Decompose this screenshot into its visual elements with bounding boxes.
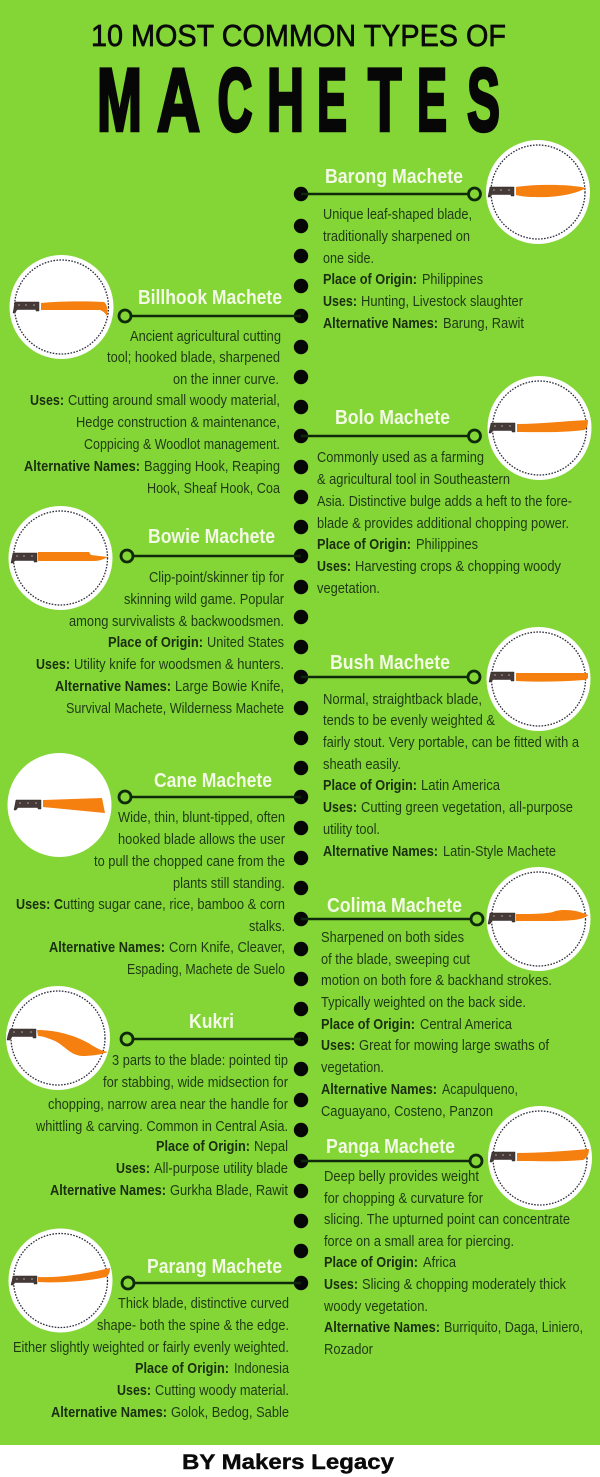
text: billhook description: Hook, Sheaf Hook, Coa: [147, 480, 281, 497]
text: barong description: Alternative Names:: [323, 315, 438, 332]
text: cane description: hooked blade allows the user: [118, 831, 285, 848]
text: kukri description: for stabbing, wide midsection for: [103, 1074, 288, 1091]
text: kukri description: 3 parts to the blade: pointed tip: [112, 1052, 288, 1069]
connector: bolo: [301, 430, 480, 442]
heading: parang machete: Parang Machete: [147, 1256, 282, 1278]
text: panga description: woody vegetation.: [323, 1298, 428, 1315]
text: bowie description: Large Bowie Knife,: [175, 678, 284, 695]
text: colima description: Alternative Names:: [321, 1081, 437, 1098]
text: panga description: force on a small area for piercing.: [324, 1233, 514, 1250]
text: cane description: Espading, Machete de Suelo: [127, 961, 285, 978]
title word: machetes: M: [97, 49, 142, 149]
text: kukri description: Alternative Names:: [50, 1182, 166, 1199]
text: colima description: motion on both fore & backhand strokes.: [321, 972, 552, 989]
text: billhook description: Cutting around small woody material,: [68, 392, 280, 409]
text: colima description: Uses:: [321, 1037, 355, 1054]
text: kukri description: Gurkha Blade, Rawit: [170, 1182, 289, 1199]
text: cane description: to pull the chopped cane from the: [94, 853, 285, 870]
text: cane description: Corn Knife, Cleaver,: [169, 939, 285, 956]
text: cane description: Wide, thin, blunt-tipped, often: [118, 809, 285, 826]
text: panga description: Rozador: [324, 1341, 373, 1358]
text: bolo description: Place of Origin:: [317, 536, 411, 553]
text: parang description: Thick blade, distinctive curved: [118, 1295, 289, 1312]
text: billhook description: Hedge construction & maintenance,: [76, 414, 280, 431]
text: bush description: utility tool.: [323, 821, 380, 838]
text: panga description: Place of Origin:: [324, 1254, 418, 1271]
text: bush description: [323, 691, 580, 860]
text: parang description: Place of Origin:: [135, 1360, 229, 1377]
text: cane description: [16, 809, 285, 978]
connector: cane: [119, 791, 301, 803]
text: panga description: Slicing & chopping moderately thick: [362, 1276, 566, 1293]
text: billhook description: Ancient agricultural cutting: [130, 328, 281, 345]
text: colima description: Typically weighted on the back side.: [321, 994, 526, 1011]
text: bowie description: United States: [207, 634, 284, 651]
connector: billhook: [119, 310, 301, 322]
text: bush description: Cutting green vegetation, all-purpose: [361, 799, 573, 816]
text: colima description: Place of Origin:: [321, 1016, 415, 1033]
text: bush description: sheath easily.: [323, 756, 401, 773]
icon: colima machete: [486, 867, 590, 971]
panel: panga machete: [301, 1106, 592, 1358]
timeline spine dots: [294, 187, 308, 1290]
panel: colima machete: [301, 867, 590, 1120]
title word: machetes: C: [218, 49, 252, 149]
text: cane description: plants still standing.: [173, 875, 285, 892]
text: colima description: [321, 929, 552, 1120]
text: colima description: Great for mowing large swaths of: [359, 1037, 550, 1054]
text: cane description: Uses: C: [16, 896, 63, 913]
text: bolo description: & agricultural tool in Southeastern: [317, 471, 510, 488]
text: bush description: tends to be evenly weighted &: [323, 712, 495, 729]
icon: bowie machete: [8, 506, 112, 610]
connector: parang: [122, 1277, 301, 1289]
text: billhook description: Bagging Hook, Reaping: [144, 458, 280, 475]
text: parang description: shape- both the spine & the edge.: [97, 1317, 289, 1334]
text: barong description: Philippines: [422, 271, 483, 288]
title word: machetes: T: [368, 49, 402, 149]
heading: billhook machete: Billhook Machete: [138, 287, 282, 309]
text: bush description: Latin America: [421, 777, 501, 794]
title line: 10 most common types of: 10 MOST COMMON TYPES OF: [91, 19, 506, 53]
text: colima description: vegetation.: [321, 1059, 384, 1076]
text: kukri description: whittling & carving. Common in Central Asia.: [35, 1118, 288, 1135]
text: bush description: Place of Origin:: [323, 777, 417, 794]
icon: kukri: [6, 986, 110, 1090]
text: panga description: [323, 1168, 583, 1358]
text: colima description: Central America: [420, 1016, 513, 1033]
text: barong description: one side.: [323, 250, 374, 267]
text: barong description: Place of Origin:: [323, 271, 417, 288]
text: kukri description: chopping, narrow area near the handle for: [48, 1096, 288, 1113]
connector: barong: [301, 188, 480, 200]
text: parang description: [13, 1295, 290, 1421]
panel: billhook machete: [10, 255, 301, 497]
panel: barong machete: [301, 140, 590, 332]
heading: bush machete: Bush Machete: [330, 652, 450, 674]
title word: machetes: [97, 49, 500, 149]
text: kukri description: [35, 1052, 289, 1199]
title: [91, 19, 506, 149]
text: bush description: Latin-Style Machete: [443, 843, 556, 860]
text: colima description: Caguayano, Costeno, Panzon: [321, 1103, 493, 1120]
text: bowie description: Uses:: [36, 656, 70, 673]
text: panga description: Alternative Names:: [324, 1319, 440, 1336]
heading: bolo machete: Bolo Machete: [335, 407, 450, 429]
icon: cane machete: [8, 753, 112, 857]
text: bush description: Alternative Names:: [323, 843, 438, 860]
text: barong description: Barung, Rawit: [443, 315, 525, 332]
text: parang description: Either slightly weighted or fairly evenly weighted.: [13, 1339, 289, 1356]
text: bowie description: [36, 569, 284, 717]
text: bolo description: [317, 449, 572, 597]
text: bowie description: Survival Machete, Wilderness Machete: [66, 700, 284, 717]
panel: cane machete: [8, 753, 301, 978]
text: parang description: Uses:: [117, 1382, 151, 1399]
text: bowie description: Clip-point/skinner tip for: [149, 569, 284, 586]
heading: kukri: Kukri: [189, 1011, 234, 1033]
text: bowie description: skinning wild game. Popular: [124, 591, 284, 608]
text: barong description: Uses:: [323, 293, 357, 310]
text: bolo description: Philippines: [416, 536, 478, 553]
heading: barong machete: Barong Machete: [325, 166, 463, 188]
text: panga description: for chopping & curvature for: [324, 1190, 483, 1207]
heading: colima machete: Colima Machete: [327, 895, 462, 917]
text: bowie description: among survivalists & backwoodsmen.: [69, 613, 284, 630]
text: bolo description: vegetation.: [317, 580, 380, 597]
connector: panga: [301, 1155, 482, 1167]
panel: bush machete: [301, 627, 590, 860]
text: cane description: utting sugar cane, rice, bamboo & corn: [63, 896, 285, 913]
text: billhook description: [24, 328, 281, 497]
text: bush description: Uses:: [323, 799, 357, 816]
text: billhook description: on the inner curve.: [173, 371, 279, 388]
panel: parang machete: [8, 1228, 301, 1421]
title word: machetes: E: [417, 49, 447, 149]
title word: machetes: E: [317, 49, 347, 149]
text: panga description: Africa: [423, 1254, 457, 1271]
text: colima description: Sharpened on both sides: [321, 929, 464, 946]
icon: bush machete: [486, 627, 590, 731]
icon: parang machete: [8, 1228, 112, 1332]
panel: bolo machete: [301, 376, 592, 597]
title word: machetes: H: [267, 49, 304, 149]
text: parang description: Alternative Names:: [51, 1404, 167, 1421]
text: billhook description: Coppicing & Woodlot management.: [84, 436, 280, 453]
icon: billhook machete: [10, 255, 114, 359]
text: bolo description: Harvesting crops & chopping woody: [355, 558, 561, 575]
text: parang description: Cutting woody material.: [155, 1382, 289, 1399]
connector: bowie: [121, 550, 301, 562]
title word: machetes: A: [157, 49, 200, 149]
text: kukri description: Uses:: [116, 1160, 150, 1177]
text: colima description: Acapulqueno,: [442, 1081, 518, 1098]
text: barong description: Unique leaf-shaped blade,: [323, 206, 472, 223]
connector: kukri: [121, 1033, 301, 1045]
text: barong description: [323, 206, 525, 332]
text: billhook description: Uses:: [30, 392, 64, 409]
heading: panga machete: Panga Machete: [326, 1136, 455, 1158]
footer credit: BY Makers Legacy: [182, 1451, 394, 1474]
connector: colima: [301, 913, 483, 925]
text: billhook description: tool; hooked blade, sharpened: [107, 349, 280, 366]
title word: machetes: S: [467, 49, 500, 149]
text: billhook description: Alternative Names:: [24, 458, 140, 475]
text: barong description: Hunting, Livestock slaughter: [361, 293, 523, 310]
icon: bolo machete: [488, 376, 592, 480]
text: parang description: Golok, Bedog, Sable: [171, 1404, 289, 1421]
icon: barong machete: [486, 140, 590, 244]
text: cane description: stalks.: [249, 918, 285, 935]
text: panga description: Uses:: [324, 1276, 358, 1293]
text: kukri description: Nepal: [254, 1138, 288, 1155]
heading: bowie machete: Bowie Machete: [148, 526, 275, 548]
text: bush description: Normal, straightback blade,: [323, 691, 482, 708]
text: kukri description: Place of Origin:: [156, 1138, 250, 1155]
panel: kukri: [6, 986, 301, 1199]
text: bowie description: Alternative Names:: [55, 678, 171, 695]
text: parang description: Indonesia: [234, 1360, 290, 1377]
text: kukri description: All-purpose utility blade: [154, 1160, 288, 1177]
panel: bowie machete: [8, 506, 301, 717]
text: bolo description: Uses:: [317, 558, 351, 575]
text: barong description: traditionally sharpened on: [323, 228, 470, 245]
heading: cane machete: Cane Machete: [154, 770, 272, 792]
connector: bush: [301, 671, 480, 683]
text: cane description: Alternative Names:: [49, 939, 165, 956]
text: bolo description: Commonly used as a farming: [317, 449, 484, 466]
text: bowie description: Place of Origin:: [108, 634, 203, 651]
text: colima description: of the blade, sweeping cut: [321, 951, 471, 968]
text: bowie description: Utility knife for woodsmen & hunters.: [74, 656, 284, 673]
icon: panga machete: [488, 1106, 592, 1210]
text: panga description: Deep belly provides weight: [324, 1168, 480, 1185]
